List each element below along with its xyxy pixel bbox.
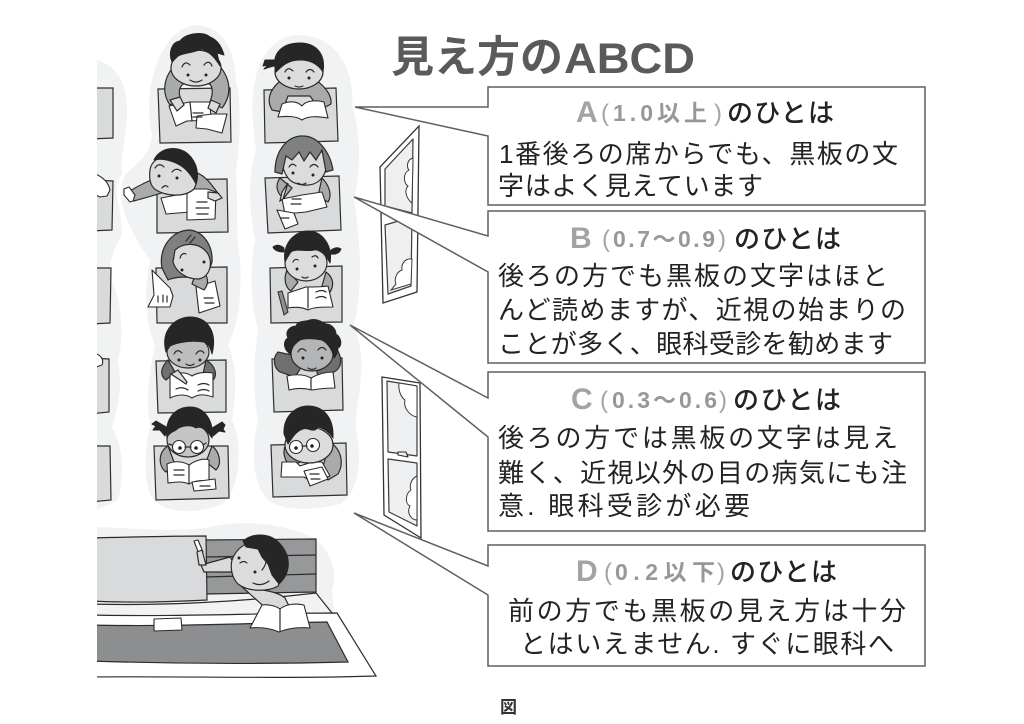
heading C: ( — [600, 387, 608, 414]
child 1 row 1 left — [165, 34, 229, 133]
child 8 row 4 right — [274, 319, 341, 390]
panel: B — [354, 197, 925, 363]
child 9 row 5 left with glasses — [152, 407, 225, 491]
heading A: のひとは — [727, 98, 834, 128]
heading B: のひとは — [734, 224, 841, 254]
heading B: B — [570, 222, 592, 255]
panel: D — [354, 513, 925, 666]
wall ledge — [90, 593, 332, 613]
child 3 row 2 left — [124, 148, 222, 220]
heading B: ) — [718, 226, 726, 253]
heading C — [571, 383, 841, 416]
open book — [250, 604, 310, 632]
callout box C — [350, 325, 925, 531]
heading D: D — [576, 555, 598, 588]
text block D — [508, 596, 906, 659]
callout box B — [354, 197, 925, 363]
heading A — [576, 96, 834, 129]
heading C: のひとは — [733, 385, 841, 415]
eraser — [154, 618, 182, 631]
title — [391, 34, 695, 83]
head — [231, 542, 282, 590]
heading A: 1.0以上 — [613, 100, 707, 126]
heading B — [570, 222, 841, 255]
child 2 row 1 right — [263, 43, 331, 120]
heading C: C — [571, 383, 593, 416]
heading A: ) — [714, 100, 722, 127]
platform — [90, 613, 376, 677]
heading D: のひとは — [730, 557, 837, 587]
heading B: 0.7〜0.9 — [613, 226, 715, 252]
clouds — [391, 158, 413, 290]
blackboard — [90, 536, 207, 602]
text block C: 難く、近視以外の目の病気にも注 — [498, 458, 907, 488]
classroom illustration — [0, 25, 421, 690]
text block B: 後ろの方でも黒板の文字はほと — [498, 261, 888, 291]
title: ABCD — [564, 35, 695, 83]
left column hands — [90, 172, 110, 369]
window lower — [382, 377, 421, 538]
panel: A — [355, 87, 925, 205]
left column desks — [90, 88, 113, 502]
clouds — [399, 383, 417, 520]
desks row by row — [154, 88, 347, 500]
panel: C — [350, 325, 925, 531]
text block C: 後ろの方では黒板の文字は見え — [498, 423, 898, 453]
text block A — [498, 139, 898, 201]
text block D: 前の方でも黒板の見え方は十分 — [508, 596, 906, 626]
title: 見え方の — [391, 34, 563, 82]
child 10 row 5 right with glasses — [281, 406, 341, 486]
text block D: とはいえません. すぐに眼科へ — [520, 629, 894, 659]
arm and chalk — [194, 540, 290, 612]
text block A: 1番後ろの席からでも、黒板の文 — [499, 139, 898, 169]
mask: page margin beside the classroom — [0, 40, 97, 690]
window upper — [380, 126, 419, 303]
heading A: ( — [601, 100, 609, 127]
heading D: ) — [717, 559, 725, 586]
child 5 row 3 left — [148, 230, 220, 313]
callout box A — [355, 87, 925, 205]
text block B: ことが多く、眼科受診を勧めます — [498, 329, 893, 359]
heading D — [576, 555, 837, 588]
child 4 row 2 right — [275, 136, 333, 229]
text block C: 意. 眼科受診が必要 — [498, 491, 750, 521]
text block A: 字はよく見えています — [498, 171, 763, 201]
heading C: 0.3〜0.6 — [612, 387, 717, 413]
figure caption: 図 — [500, 698, 517, 717]
heading D: ( — [604, 559, 612, 586]
heading B: ( — [602, 226, 610, 253]
text block B — [498, 261, 906, 359]
heading D: 0.2以下 — [615, 559, 715, 585]
child 6 row 3 right — [273, 231, 341, 315]
text block C — [498, 423, 907, 521]
callout box D — [354, 513, 925, 666]
teacher blackboard scene — [90, 535, 376, 677]
text block B: んど読めますが、近視の始まりの — [498, 295, 906, 325]
striped wall — [205, 539, 316, 594]
child 7 row 4 left — [162, 317, 215, 398]
background halos — [97, 25, 361, 622]
heading A: A — [576, 96, 598, 129]
dark rug — [90, 622, 348, 663]
heading C: ) — [719, 387, 727, 414]
